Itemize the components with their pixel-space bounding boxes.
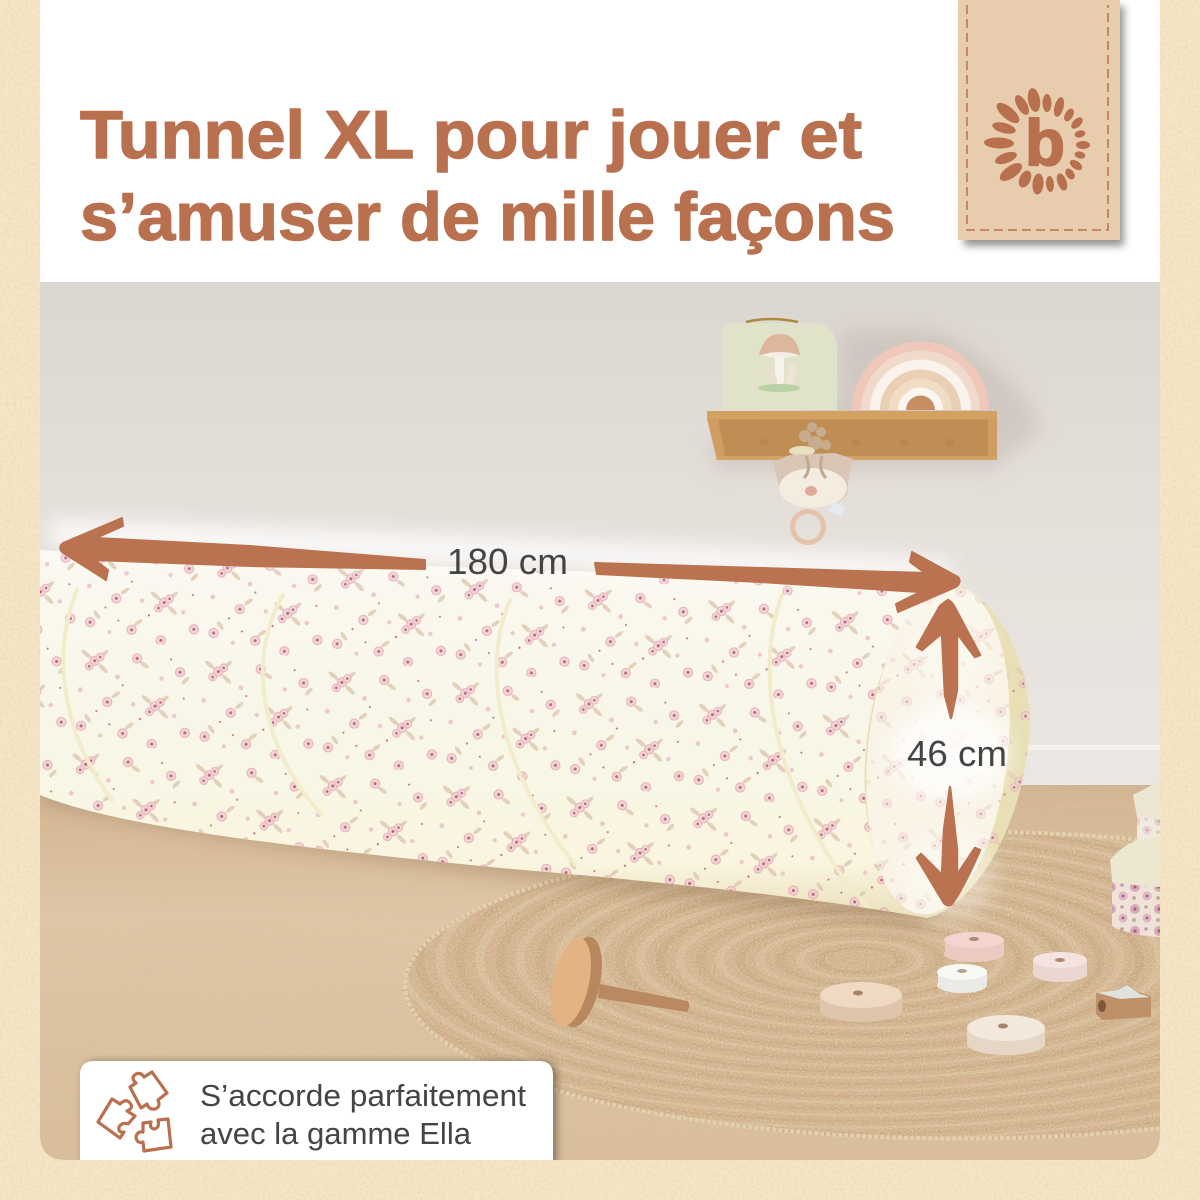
- callout: [80, 1061, 557, 1171]
- title: [80, 97, 895, 255]
- arrow: diameter down: [917, 787, 980, 905]
- icon: mushroom: [758, 334, 800, 392]
- white header panel: [40, 0, 1160, 282]
- tunnel rim: [864, 585, 1030, 918]
- icon: sun logo: b: [1025, 106, 1065, 179]
- arrow: length right: [595, 552, 960, 612]
- callout text: S’accorde parfaitement: [200, 1078, 526, 1113]
- shadow under tunnel: [40, 780, 950, 925]
- title: Tunnel XL pour jouer et: [80, 97, 862, 173]
- suitcase: [722, 319, 837, 410]
- baseboard: [1028, 745, 1160, 750]
- label: length: 180 cm: [447, 541, 568, 582]
- brand tag with logo: [958, 0, 1124, 246]
- stacker discs: [820, 932, 1151, 1055]
- wooden rainbow: [852, 342, 989, 410]
- icon: sun logo: [984, 87, 1090, 195]
- tunnel hoops: [63, 590, 870, 910]
- boxes on the floor: [1110, 782, 1160, 937]
- label: diameter: 46 cm: [907, 733, 1007, 774]
- photo panel: [40, 282, 1200, 1171]
- rug: [403, 830, 1160, 1140]
- title: s’amuser de mille façons: [80, 179, 895, 255]
- tunnel: [40, 540, 1047, 930]
- callout text: avec la gamme Ella: [200, 1116, 472, 1151]
- white glow behind dimensions: [50, 520, 1008, 920]
- plush deer toy: [773, 422, 853, 542]
- arrow: length left: [60, 518, 425, 580]
- shelf: [707, 411, 997, 460]
- arrow: diameter up: [917, 600, 980, 718]
- icon: puzzle pieces: [98, 1072, 171, 1151]
- shelf shadow: [706, 330, 1040, 470]
- wooden stacker peg: [551, 937, 690, 1028]
- tunnel opening: [866, 586, 1010, 914]
- wall: [40, 282, 1160, 792]
- callout text: [200, 1078, 526, 1151]
- wooden floor: [40, 785, 1160, 1160]
